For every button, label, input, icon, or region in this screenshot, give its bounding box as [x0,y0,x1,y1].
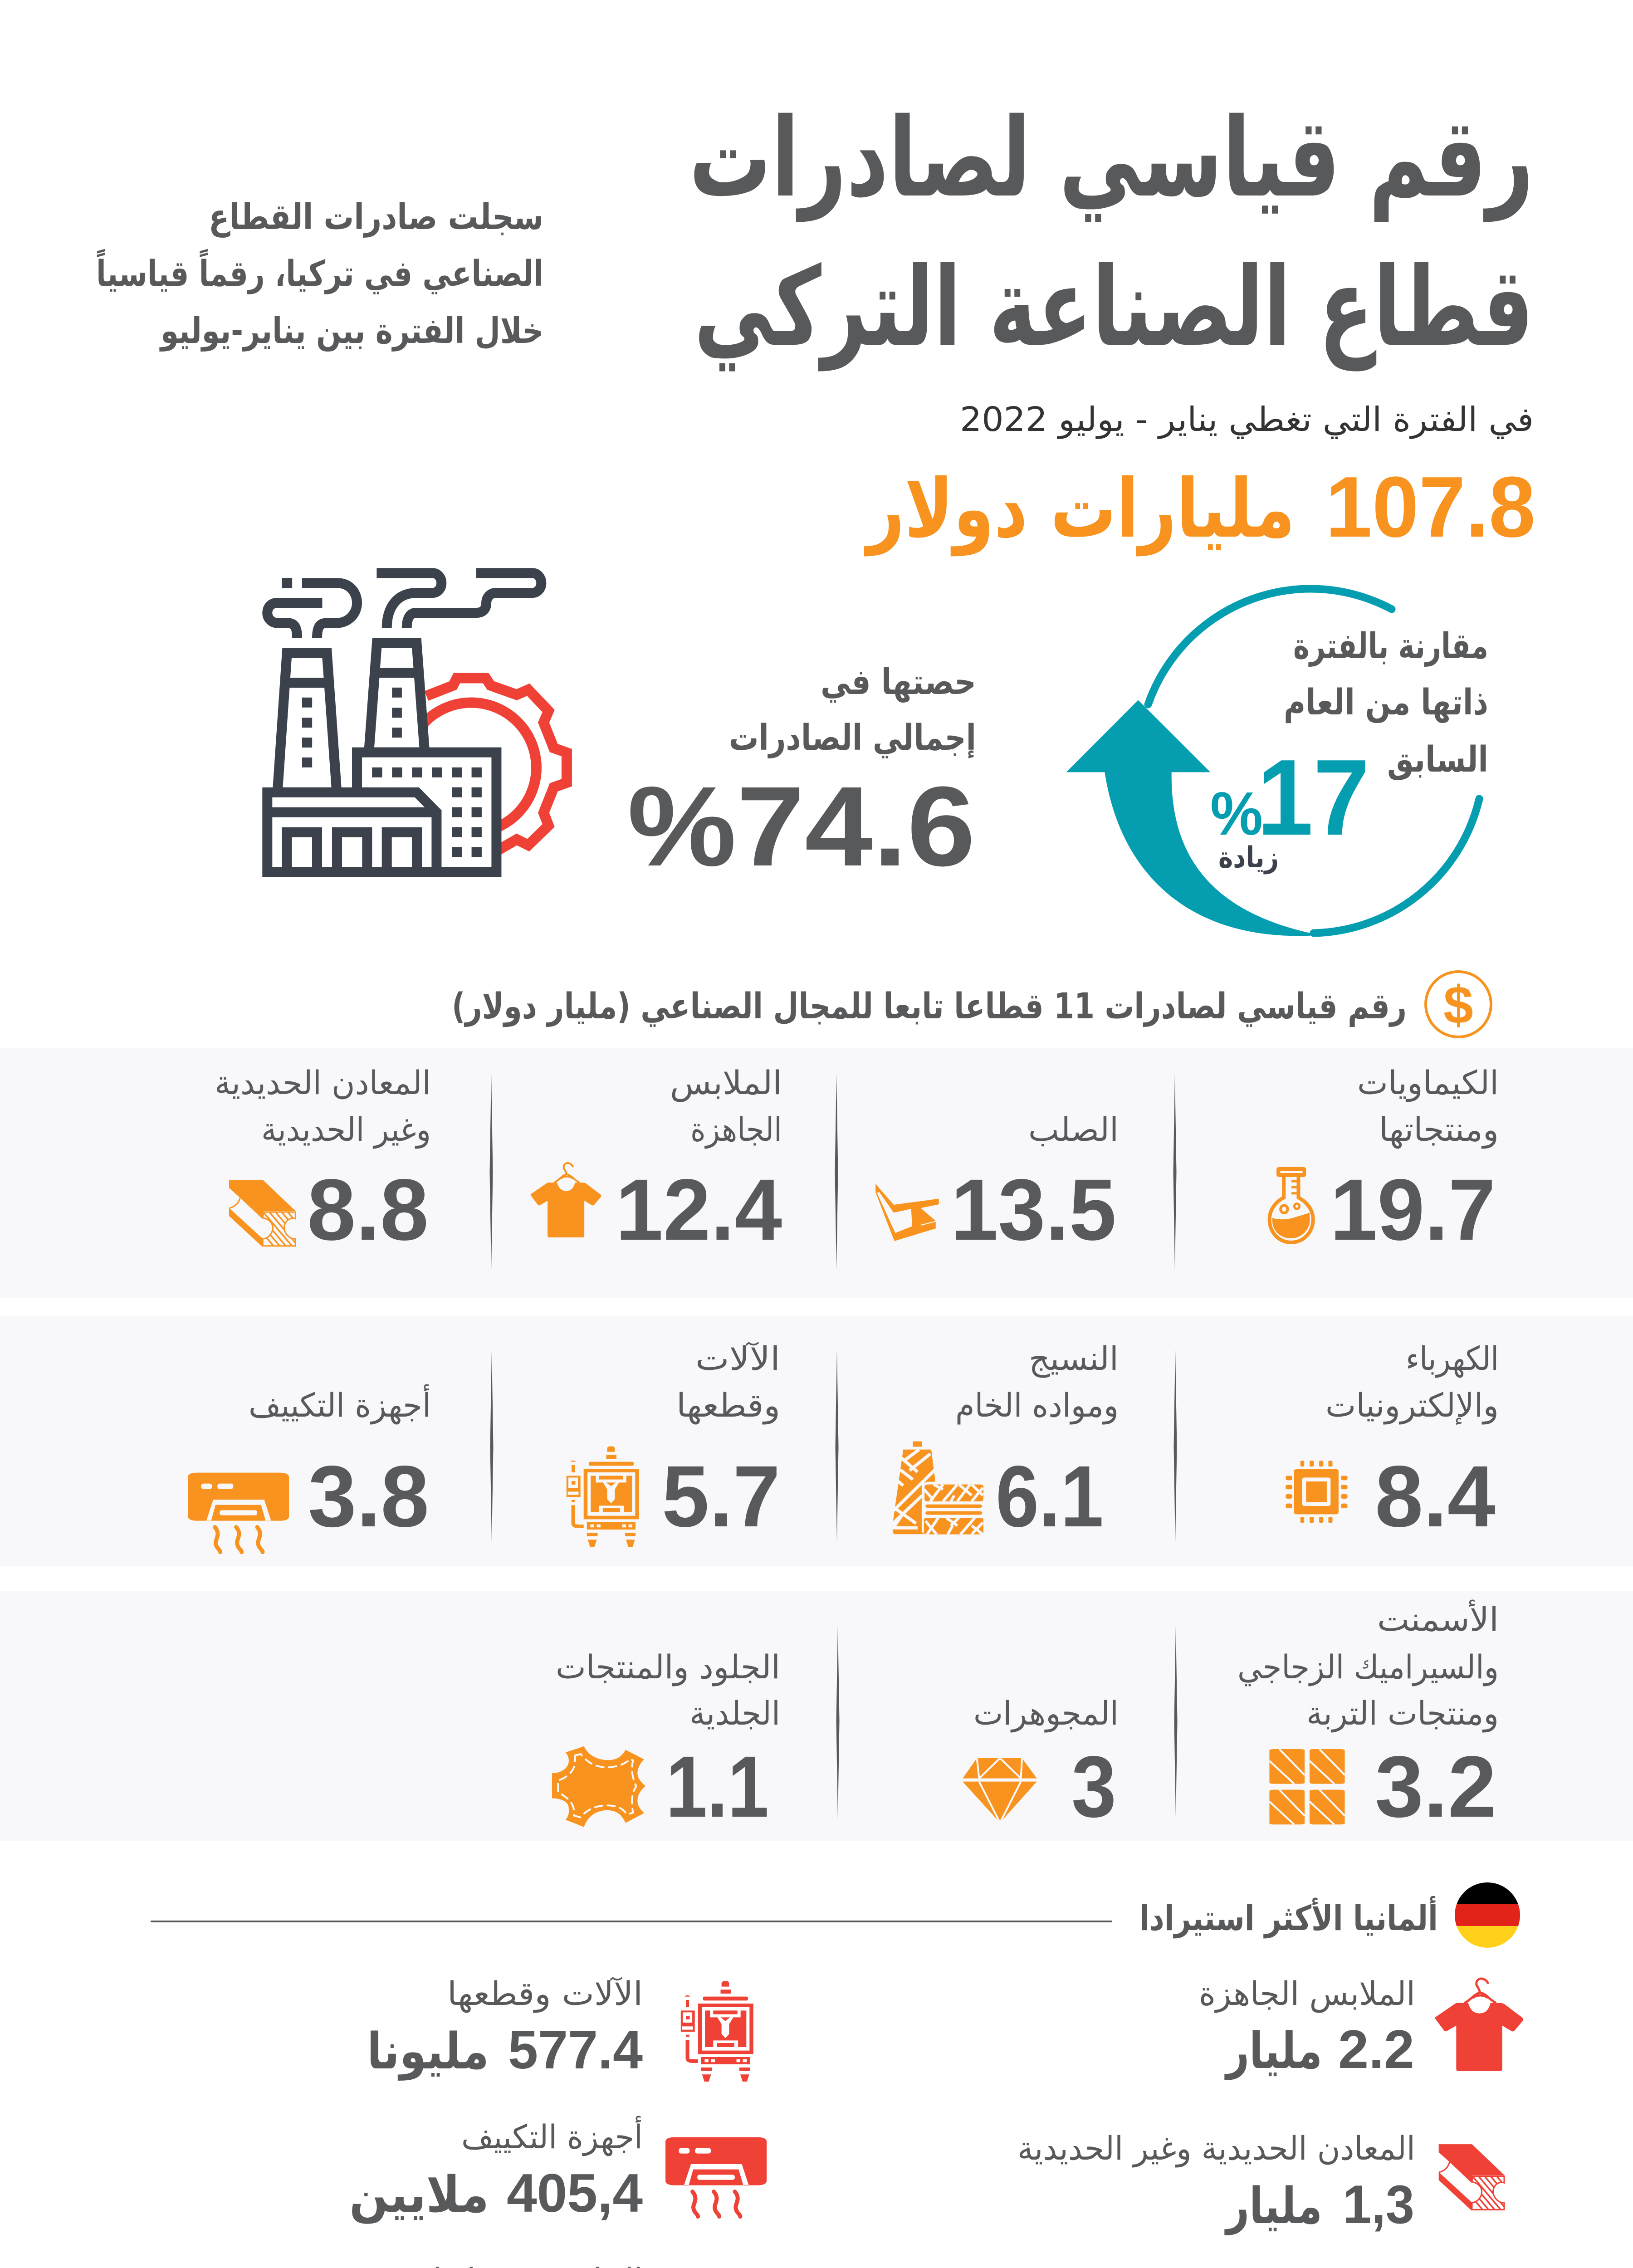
intro paragraph: سجلت صادرات القطاع [209,197,543,238]
panel: growth compared to previous year [1066,589,1488,936]
sector: cement and ceramics: 3.2 [1375,1738,1496,1835]
item: garments: الملابس الجاهزة [1199,1975,1415,2013]
sector: metals [215,1064,431,1258]
item: garments: مليار [1224,2022,1322,2080]
increase 17 percent: 17 [1257,738,1369,858]
panel: sector row 3 [0,1591,1633,1841]
panel: Germany top importer [151,1882,1529,2268]
sector: ready-made garments: 12.4 [616,1161,782,1258]
title [689,94,1534,371]
sector: textiles [890,1339,1119,1545]
headline figure: 107.8 [1325,459,1535,555]
comparison text [1284,626,1488,780]
panel: share of total exports: حصتها في [821,662,976,703]
circular arrow [1066,589,1479,936]
item: metals: المعادن الحديدية وغير الحديدية [1017,2129,1415,2168]
sector: electronics: 8.4 [1375,1447,1496,1545]
sector: leather: 1.1 [666,1738,769,1835]
item: air conditioners: 405,4 [507,2163,643,2224]
panel: sector row 1 [0,1048,1633,1298]
item: metals: مليار [1224,2177,1322,2235]
sector: steel: الصلب [1028,1110,1119,1149]
sector: metals: المعادن الحديدية [215,1064,431,1102]
icon: dollar coin [1426,972,1491,1037]
sector: cement and ceramics: والسيراميك الزجاجي [1237,1648,1499,1686]
intro paragraph: الصناعي في تركيا، رقماً قياسياً [96,249,543,294]
comparison text: السابق [1387,739,1488,780]
icon: leather hide [552,1746,645,1827]
icon: factory with gear [267,573,567,872]
section heading: 11 sectors: رقم قياسي لصادرات 11 قطاعا تابعا للمجال الصناعي (مليار دولار) [452,986,1407,1027]
sector: leather [552,1648,780,1835]
comparison text: ذاتها من العام [1284,682,1488,723]
sector: cement and ceramics [1237,1599,1499,1835]
icon: steel profile [875,1184,939,1241]
sector: leather: الجلود والمنتجات [556,1648,780,1686]
sector: jewellery: المجوهرات [973,1694,1119,1733]
increase 17 percent: زيادة [1218,841,1279,875]
icon: metal beam [1439,2144,1529,2214]
sector: ready-made garments: الملابس [670,1064,782,1102]
icon: metal beam [229,1180,320,1251]
sector: electronics: الكهرباء [1406,1339,1499,1378]
item: machinery [367,1975,753,2082]
icon: machine [681,1981,753,2082]
item: machinery: 577.4 [508,2019,643,2080]
icon: shirt [1435,1979,1523,2071]
panel: share of total exports [627,662,976,890]
sector: jewellery: 3 [1071,1738,1116,1835]
headline figure: مليارات دولار [864,462,1295,557]
sector: steel: 13.5 [951,1161,1116,1258]
sector: textiles: النسيج [1029,1339,1119,1378]
item: air conditioners: ملايين [349,2165,489,2224]
sector: machinery: 5.7 [662,1447,780,1545]
sector: textiles: ومواده الخام [955,1386,1119,1425]
increase 17 percent [1210,738,1369,875]
subtitle: period: في الفترة التي تغطي يناير - يوليو 2022 [960,400,1534,439]
sector: chemicals: ومنتجاتها [1379,1110,1499,1149]
panel: share of total exports: %74.6 [627,763,975,890]
item: garments: 2.2 [1338,2019,1414,2080]
item: garments [1199,1975,1523,2080]
intro paragraph [96,197,543,352]
sector: leather: الجلدية [689,1694,780,1732]
item: machinery: الآلات وقطعها [447,1975,643,2013]
sector: metals: وغير الحديدية [261,1110,431,1149]
icon: air conditioner [188,1473,289,1552]
sector: chemicals [1270,1064,1499,1258]
icon: diamond [963,1758,1037,1823]
sector: cement and ceramics: ومنتجات التربة [1306,1694,1499,1733]
item: machinery: مليونا [367,2022,489,2081]
sector: air conditioners: أجهزة التكييف [249,1384,431,1425]
icon: flask [1270,1167,1313,1242]
icon: dollar coin: $ [1443,975,1473,1035]
panel: share of total exports: إجمالي الصادرات [729,718,976,759]
icon: machine [567,1446,639,1547]
icon: German flag [1452,1882,1524,1948]
sector: chemicals: 19.7 [1330,1161,1496,1258]
sector: jewellery [963,1694,1119,1835]
panel: sector row 2 [0,1316,1633,1566]
item: metals: 1,3 [1343,2174,1414,2235]
sector: ready-made garments [531,1064,782,1258]
increase 17 percent: % [1210,779,1263,848]
icon: air conditioner [665,2137,767,2217]
sector: textiles: 6.1 [996,1447,1104,1545]
icon: chip [1286,1461,1347,1523]
item: metals [1017,2129,1529,2235]
sector: steel [875,1110,1119,1258]
sector: electronics: والإلكترونيات [1325,1386,1499,1425]
sector: air conditioners [188,1384,431,1552]
icon: tiles [1269,1749,1345,1824]
sector: machinery [567,1339,780,1547]
comparison text: مقارنة بالفترة [1293,626,1488,667]
sector: air conditioners: 3.8 [308,1447,429,1545]
icon: shirt [531,1163,601,1237]
sector: metals: 8.8 [307,1161,429,1258]
sector: ready-made garments: الجاهزة [690,1110,782,1149]
sector: electronics [1286,1339,1499,1545]
icon: yarn [890,1442,985,1535]
sector: chemicals: الكيماويات [1357,1064,1499,1102]
sector: cement and ceramics: الأسمنت [1377,1599,1499,1638]
intro paragraph: خلال الفترة بين يناير-يوليو [159,311,543,352]
sector: machinery: وقطعها [676,1386,780,1425]
sector: machinery: الآلات [695,1339,780,1378]
item: air conditioners: أجهزة التكييف [461,2116,643,2156]
heading: ألمانيا الأكثر استيرادا [1139,1896,1438,1939]
item: air conditioners [349,2116,767,2224]
section heading: 11 sectors [452,972,1491,1037]
